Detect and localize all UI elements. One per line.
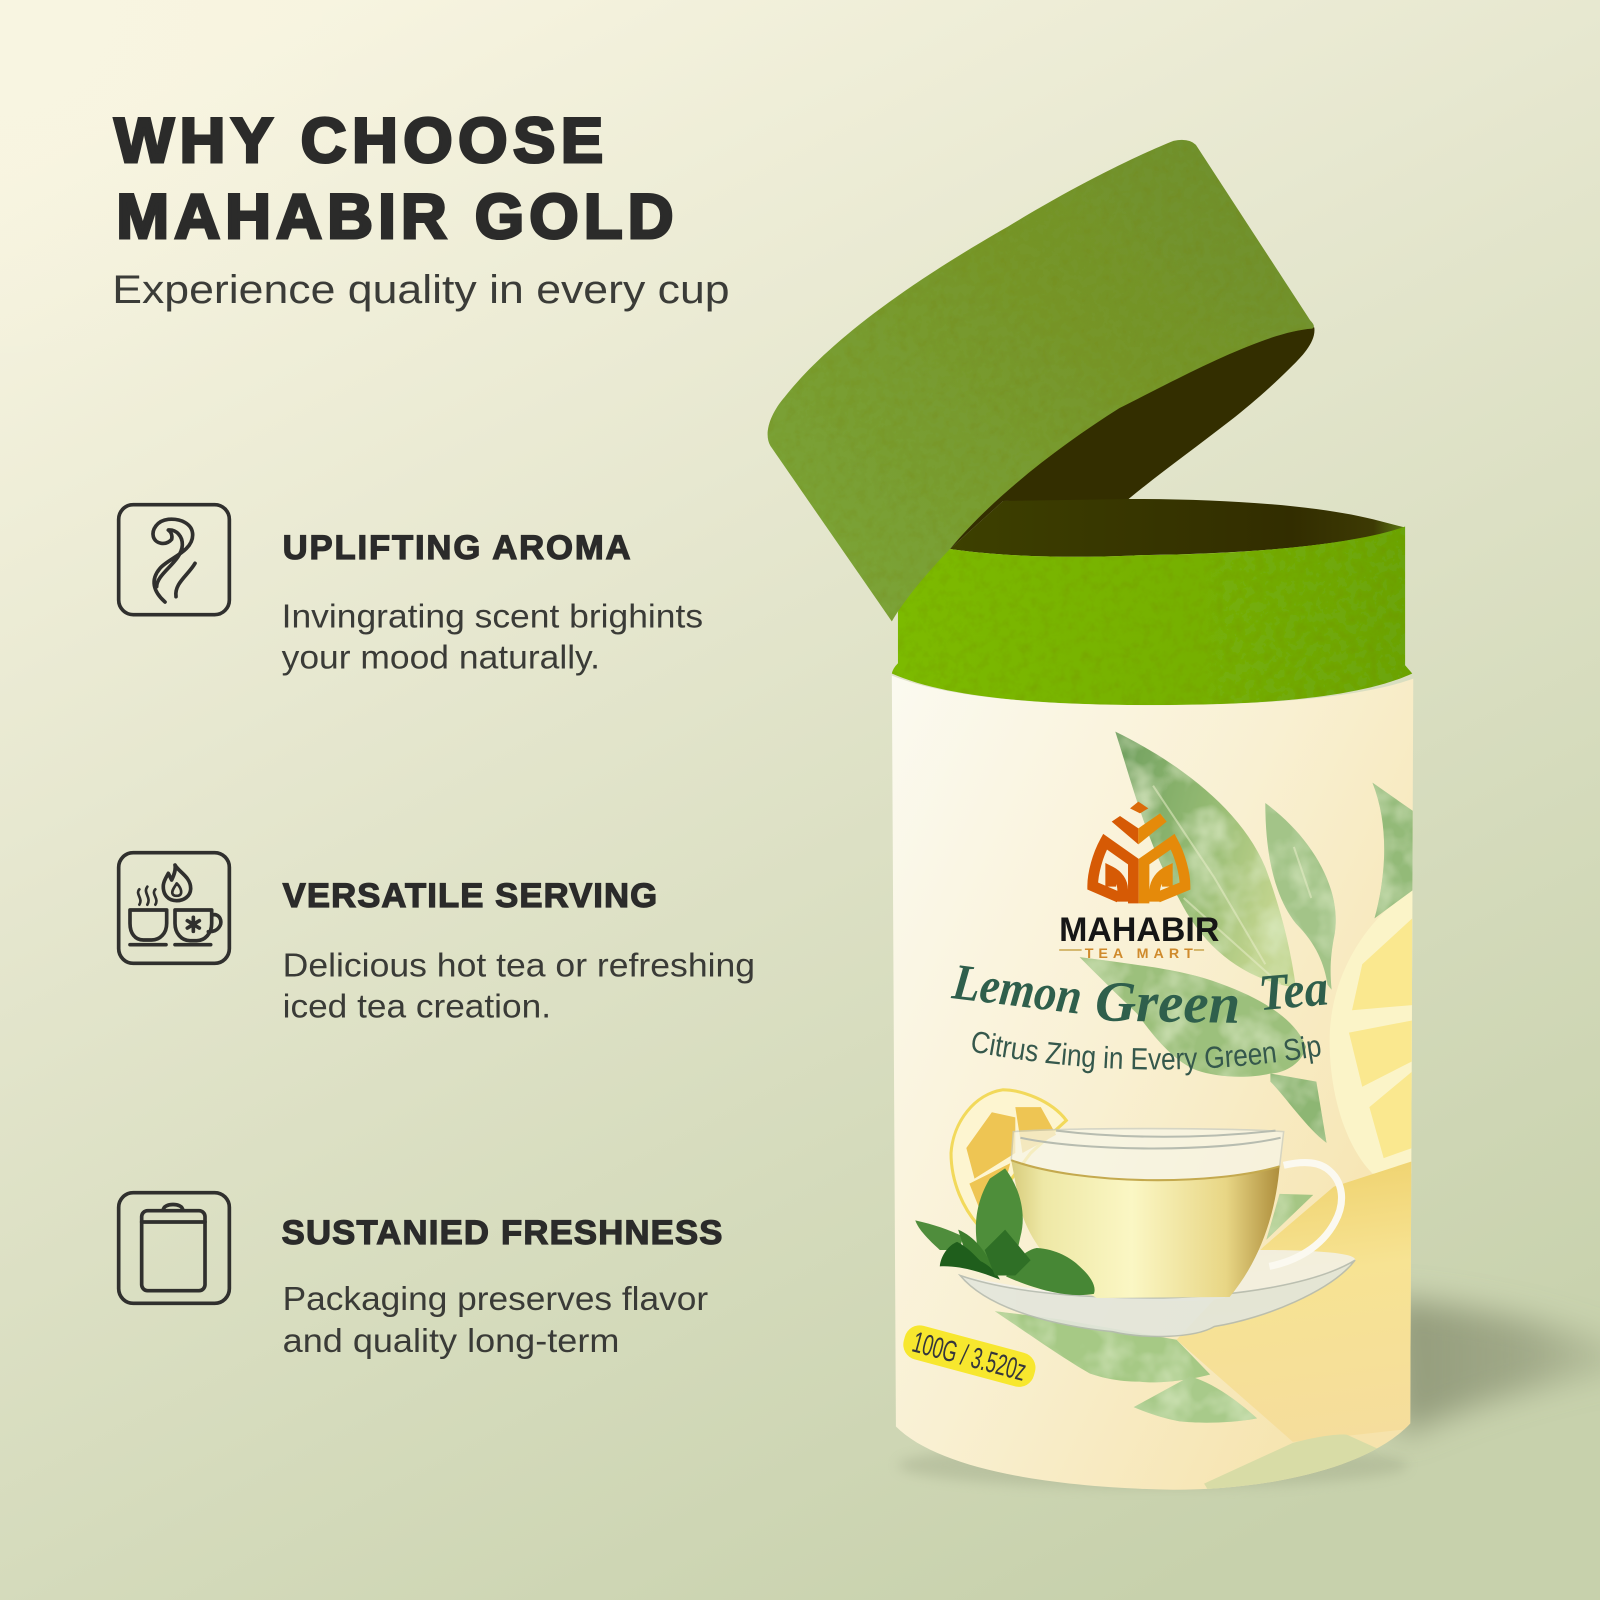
icon: storage jar (119, 1193, 229, 1303)
description: your mood naturally. (282, 639, 600, 676)
title: MAHABIR GOLD (116, 182, 673, 252)
glass saucer (960, 1250, 1355, 1336)
big lemon (1330, 890, 1412, 1174)
description: and quality long-term (283, 1323, 619, 1360)
feature: uplifting aroma (119, 505, 703, 676)
glass cup (1011, 1129, 1284, 1298)
heading: SUSTANIED FRESHNESS (282, 1214, 722, 1252)
title: WHY CHOOSE (114, 106, 603, 176)
weight badge (900, 1322, 1039, 1390)
description (283, 948, 755, 1025)
canister tube interior (950, 498, 1405, 557)
open lid (768, 140, 1314, 621)
description (283, 1281, 708, 1360)
icon: hot and iced cups (119, 853, 229, 963)
leaf veins (1153, 786, 1311, 985)
tagline rule (1059, 949, 1204, 951)
title (114, 106, 673, 252)
product name: Lemon (949, 954, 1085, 1026)
label artwork (915, 732, 1429, 1500)
lid interior (950, 306, 1314, 549)
feature: versatile serving (119, 853, 755, 1025)
weight badge: 100G / 3.520z (909, 1326, 1030, 1388)
product: tea canister (768, 140, 1414, 1490)
description: Invingrating scent brighints (282, 599, 703, 636)
yellow lower panel (1177, 1161, 1412, 1442)
mint leaves (915, 1168, 1095, 1295)
subtitle: Experience quality in every cup (112, 268, 730, 312)
logo tagline: TEA MART (1085, 946, 1193, 962)
description (282, 599, 703, 676)
green inner tube (892, 527, 1412, 705)
icon: aroma swirl (119, 505, 229, 615)
product name (949, 954, 1330, 1036)
logo mark (1093, 802, 1185, 903)
heading: UPLIFTING AROMA (283, 529, 631, 567)
floor shadow (898, 1298, 1600, 1488)
description: iced tea creation. (283, 988, 551, 1025)
description: Packaging preserves flavor (283, 1281, 708, 1318)
watercolor leaves (995, 732, 1413, 1423)
product name: Tea (1256, 960, 1330, 1022)
description: Delicious hot tea or refreshing (283, 948, 755, 985)
lemon slice (951, 1090, 1066, 1224)
product name: Green (1095, 970, 1241, 1036)
pale bottom leaf (1204, 1434, 1377, 1489)
glass handle (1269, 1163, 1342, 1266)
heading: VERSATILE SERVING (283, 877, 657, 915)
feature: sustained freshness (119, 1193, 722, 1360)
canister label body (892, 676, 1413, 1490)
logo wordmark: MAHABIR (1059, 911, 1219, 949)
brand logo (1059, 802, 1219, 962)
product tagline: Citrus Zing in Every Green Sip (972, 1032, 1320, 1076)
